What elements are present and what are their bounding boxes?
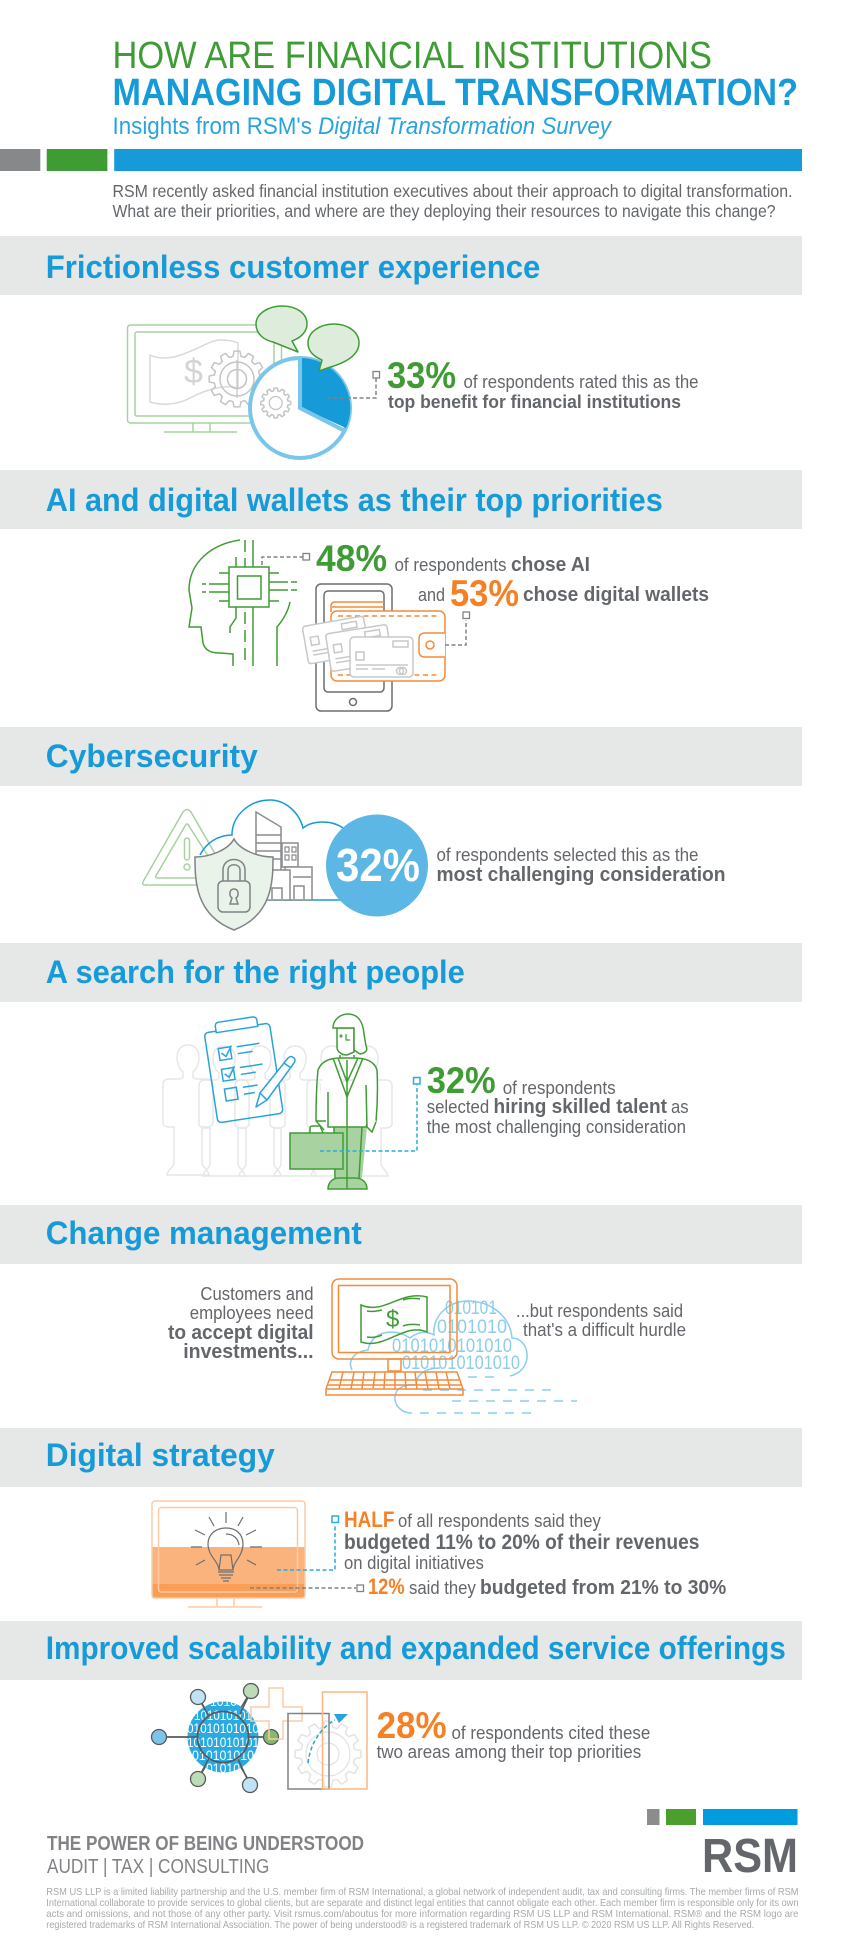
connector: [320, 1078, 420, 1151]
icon: monitor with bill and gears: [128, 325, 282, 432]
icon: data globe network: 010101010: [192, 1747, 254, 1763]
footer colour bars: [647, 1809, 798, 1825]
icon: data globe network: 01010: [206, 1760, 240, 1776]
icon: business woman with briefcase: [290, 1014, 377, 1189]
connector: wallet: [445, 612, 470, 645]
intro text: RSM recently asked financial institution executives about their approach to digital transformation.: [112, 181, 792, 201]
chart: pie with highlighted one third: [250, 358, 350, 458]
icon: computer with money: $: [386, 1306, 399, 1333]
stat circle: 32 percent: [326, 814, 428, 916]
intro text: [112, 181, 792, 221]
right text: [516, 1301, 686, 1340]
stat: 32 percent talent: hiring skilled talent: [494, 1096, 667, 1118]
panel: digital strategy: [0, 1428, 802, 1607]
left text: employees need: [190, 1303, 314, 1323]
left text: investments...: [183, 1341, 314, 1363]
heading: Digital strategy: [46, 1437, 275, 1473]
stat: 33 percent: 33%: [387, 355, 456, 396]
icon: phone with wallet and cards: [302, 584, 445, 711]
connector: 12 percent: [250, 1585, 364, 1592]
panel: AI and digital wallets: [0, 470, 802, 711]
stat: 48 percent: 48%: [316, 538, 387, 579]
title: HOW ARE FINANCIAL INSTITUTIONS: [112, 35, 712, 77]
icon: binary clouds: [351, 1298, 577, 1413]
heading: Change management: [46, 1215, 362, 1251]
icon: buildings: [256, 812, 312, 900]
stat text: of respondents selected this as the: [436, 845, 698, 865]
tagline: THE POWER OF BEING UNDERSTOOD: [47, 1833, 364, 1855]
subtitle: Insights from RSM's Digital Transformation Survey: [112, 113, 613, 140]
stat: 32 percent talent: as: [671, 1097, 688, 1117]
section band 4: [0, 943, 802, 1002]
icon: computer with money: [326, 1279, 463, 1395]
heading: Cybersecurity: [46, 738, 258, 774]
header colour bars: [0, 149, 802, 171]
icon: data globe network: 10101010101: [187, 1734, 259, 1750]
stat: 32 percent talent: 32%: [427, 1060, 496, 1101]
heading: AI and digital wallets as their top priorities: [46, 482, 663, 518]
stat: half of respondents: of all respondents said they: [398, 1511, 601, 1531]
left text: to accept digital: [168, 1322, 314, 1344]
panel: frictionless customer experience: [0, 236, 802, 458]
icon: clipboard checklist: [203, 1015, 295, 1123]
icon: plus sign: [251, 1688, 302, 1739]
icon: row of ghost candidates: [163, 1045, 392, 1176]
icon: gear with growth arrow: [288, 1692, 367, 1789]
stat: half of respondents: [344, 1507, 699, 1573]
heading: A search for the right people: [46, 954, 465, 990]
stat text: [436, 845, 726, 886]
panel: improved scalability: [0, 1621, 802, 1792]
stat: 28 percent: 28%: [377, 1705, 447, 1746]
stat: 53 percent: and: [418, 585, 445, 605]
right text: ...but respondents said: [516, 1301, 683, 1321]
stat: 32 percent talent: selected: [427, 1097, 489, 1117]
stat: 33 percent: of respondents rated this as the: [464, 372, 698, 392]
left text: [168, 1284, 314, 1363]
panel: a search for the right people: [0, 943, 802, 1189]
stat: 48 percent: chose AI: [511, 554, 590, 576]
connector: AI: [262, 554, 310, 565]
icon: data globe network: [152, 1684, 278, 1792]
icon: binary clouds: 0101010101010: [402, 1353, 520, 1374]
section band 3: [0, 727, 802, 786]
legal disclaimer: registered trademarks of RSM International Association. The power of being understood® is a registered trademark of RSM US LLP. © 2020 RSM US LLP. All Rights Reserved.: [46, 1919, 754, 1931]
icon: speech bubbles: [256, 306, 359, 371]
icon: monitor with light bulb: [152, 1501, 305, 1607]
icon: cloud: [200, 800, 343, 900]
right text: that's a difficult hurdle: [523, 1320, 686, 1340]
heading: Improved scalability and expanded service offerings: [46, 1630, 786, 1666]
icon: monitor with bill and gears: $: [184, 353, 203, 391]
section band 2: [0, 470, 802, 529]
title: [112, 35, 798, 114]
icon: AI head with chip: [189, 540, 297, 666]
stat: half of respondents: budgeted 11% to 20% of their revenues: [344, 1531, 699, 1554]
stat: half of respondents: HALF: [344, 1507, 394, 1532]
heading: Frictionless customer experience: [46, 249, 540, 285]
section band 5: [0, 1205, 802, 1264]
stat circle: 32 percent: 32%: [336, 839, 420, 891]
stat: 32 percent talent: [427, 1060, 688, 1137]
panel: change management: [0, 1205, 802, 1413]
stat: 32 percent talent: of respondents: [503, 1078, 616, 1098]
stat: 33 percent: top benefit for financial institutions: [388, 392, 681, 412]
icon: binary clouds: 0101010101010: [392, 1336, 512, 1357]
section band 1: [0, 236, 802, 295]
RSM logo: RSM: [702, 1830, 798, 1883]
connector: half: [277, 1516, 338, 1570]
left text: Customers and: [200, 1284, 314, 1304]
legal disclaimer: [46, 1886, 799, 1931]
legal disclaimer: acts and omissions, and not those of any other party. Visit rsmus.com/aboutus for more information regarding RSM US LLP and RSM International. RSM® and the RSM logo are: [46, 1908, 799, 1920]
icon: binary clouds: 0101010: [437, 1317, 507, 1338]
stat: 48 percent: [316, 538, 590, 579]
icon: binary clouds: 010101: [445, 1298, 497, 1319]
stat text: most challenging consideration: [436, 864, 726, 886]
icon: shield with padlock: [195, 839, 273, 930]
icon: data globe network: 101010101: [194, 1707, 252, 1723]
stat: 48 percent: of respondents: [394, 555, 506, 575]
panel: cybersecurity: [0, 727, 802, 930]
stat: 12 percent: said they: [409, 1578, 476, 1598]
stat: 28 percent: [377, 1705, 650, 1762]
icon: data globe network: 1010: [210, 1693, 237, 1709]
stat: 28 percent: two areas among their top priorities: [377, 1742, 641, 1762]
stat: 12 percent: 12%: [368, 1574, 405, 1599]
intro text: What are their priorities, and where are they deploying their resources to navigate this change?: [112, 201, 776, 221]
stat: 32 percent talent: the most challenging consideration: [427, 1117, 686, 1137]
stat: 53 percent: chose digital wallets: [523, 584, 709, 606]
connector: [327, 372, 380, 398]
stat: 28 percent: of respondents cited these: [452, 1723, 650, 1743]
section band 6: [0, 1428, 802, 1487]
stat: 33 percent: [387, 355, 698, 412]
stat: 12 percent: [368, 1574, 726, 1599]
icon: warning triangle: [143, 810, 233, 885]
tagline: [47, 1833, 364, 1878]
tagline: AUDIT | TAX | CONSULTING: [47, 1856, 269, 1878]
stat: 12 percent: budgeted from 21% to 30%: [480, 1577, 726, 1599]
stat: 53 percent: [418, 573, 709, 614]
stat: 53 percent: 53%: [450, 573, 519, 614]
stat: half of respondents: on digital initiatives: [344, 1553, 484, 1573]
section band 7: [0, 1621, 802, 1680]
icon: data globe network: 01010101010: [187, 1720, 259, 1736]
